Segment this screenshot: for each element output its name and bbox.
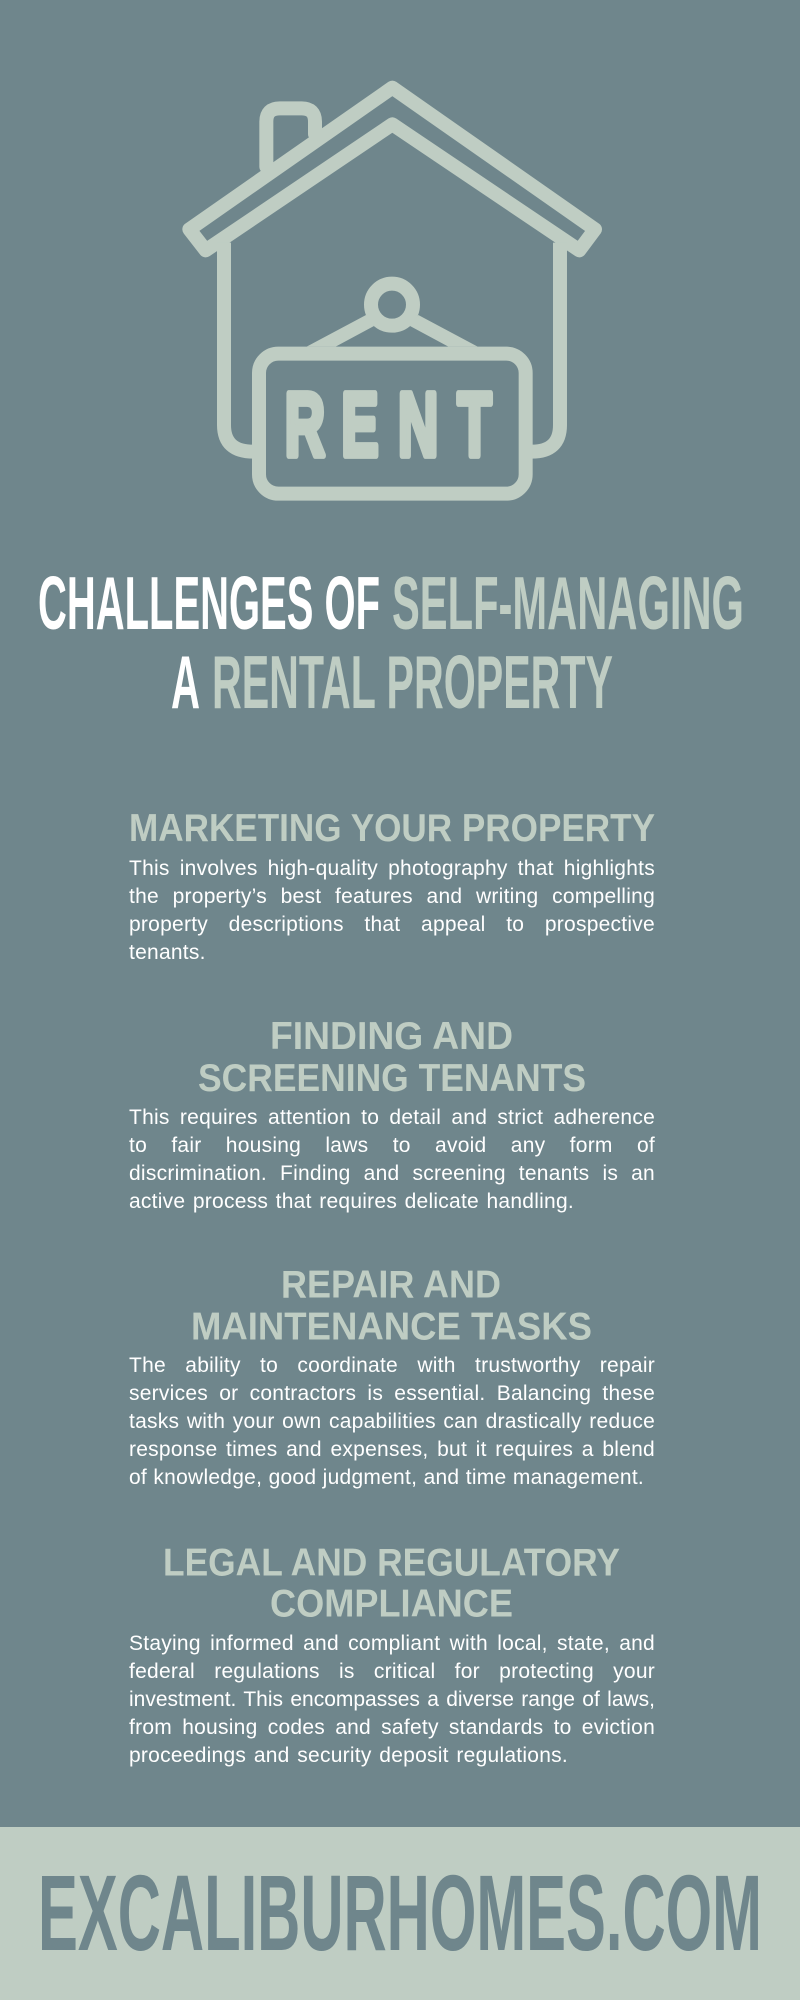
text: legal description: proceedings and security deposit regulations. <box>129 1744 568 1767</box>
text: legal description: Staying informed and compliant with local, state, and <box>129 1632 655 1655</box>
text: marketing description: tenants. <box>129 941 206 964</box>
heading: repair and maintenance tasks <box>191 1265 592 1349</box>
icon part: chimney <box>266 108 315 167</box>
text: legal description: federal regulations is critical for protecting your <box>129 1660 655 1683</box>
heading: marketing your property: MARKETING YOUR PROPERTY <box>129 805 655 849</box>
footer band with website <box>0 1827 800 2000</box>
text: repair description: of knowledge, good judgment, and time management. <box>129 1466 644 1489</box>
text: legal description <box>129 1632 655 1767</box>
heading: repair and maintenance tasks: MAINTENANCE TASKS <box>191 1306 592 1349</box>
footer band with website: EXCALIBURHOMES.COM <box>38 1854 762 1973</box>
panel: legal and regulatory compliance <box>129 1543 655 1767</box>
text: legal description: investment. This encompasses a diverse range of laws, <box>129 1688 655 1711</box>
icon part: sign hanger <box>307 315 478 347</box>
text: marketing description: property descriptions that appeal to prospective <box>129 913 655 936</box>
heading: legal and regulatory compliance: COMPLIANCE <box>270 1581 513 1625</box>
panel: repair and maintenance tasks <box>129 1265 655 1489</box>
text: legal description: from housing codes and safety standards to eviction <box>129 1716 655 1739</box>
icon part: rent lettering: RENT <box>285 374 492 475</box>
icon part: roof <box>189 88 595 250</box>
title <box>38 560 744 720</box>
text: finding tenants description: to fair housing laws to avoid any form of <box>129 1134 655 1157</box>
text: finding tenants description: discrimination. Finding and screening tenants is an <box>129 1162 655 1185</box>
icon part: sign ring <box>371 284 413 326</box>
icon part: sign board <box>259 354 526 494</box>
text: repair description: tasks with your own capabilities can drastically reduce <box>129 1410 655 1433</box>
icon part: house walls <box>224 243 560 452</box>
heading: finding and screening tenants: FINDING AND <box>270 1015 513 1058</box>
text: repair description <box>129 1354 655 1489</box>
heading: finding and screening tenants: SCREENING TENANTS <box>198 1056 586 1099</box>
heading: legal and regulatory compliance <box>163 1543 620 1625</box>
text: finding tenants description: active process that requires delicate handling. <box>129 1190 574 1213</box>
text: marketing description <box>129 857 655 964</box>
heading: finding and screening tenants <box>198 1015 586 1099</box>
panel: marketing your property <box>129 805 655 964</box>
panel: finding and screening tenants <box>129 1015 655 1213</box>
title: CHALLENGES OF <box>38 560 380 645</box>
text: marketing description: This involves high-quality photography that highlights <box>129 857 655 880</box>
text: finding tenants description <box>129 1106 655 1213</box>
text: repair description: The ability to coordinate with trustworthy repair <box>129 1354 655 1377</box>
text: repair description: services or contractors is essential. Balancing these <box>129 1382 655 1405</box>
title: SELF-MANAGING <box>392 561 744 645</box>
text: finding tenants description: This requires attention to detail and strict adherence <box>129 1106 655 1129</box>
text: marketing description: the property’s best features and writing compelling <box>129 885 655 908</box>
text: repair description: response times and expenses, but it requires a blend <box>129 1438 655 1461</box>
icon: house with hanging rent sign <box>182 80 602 501</box>
